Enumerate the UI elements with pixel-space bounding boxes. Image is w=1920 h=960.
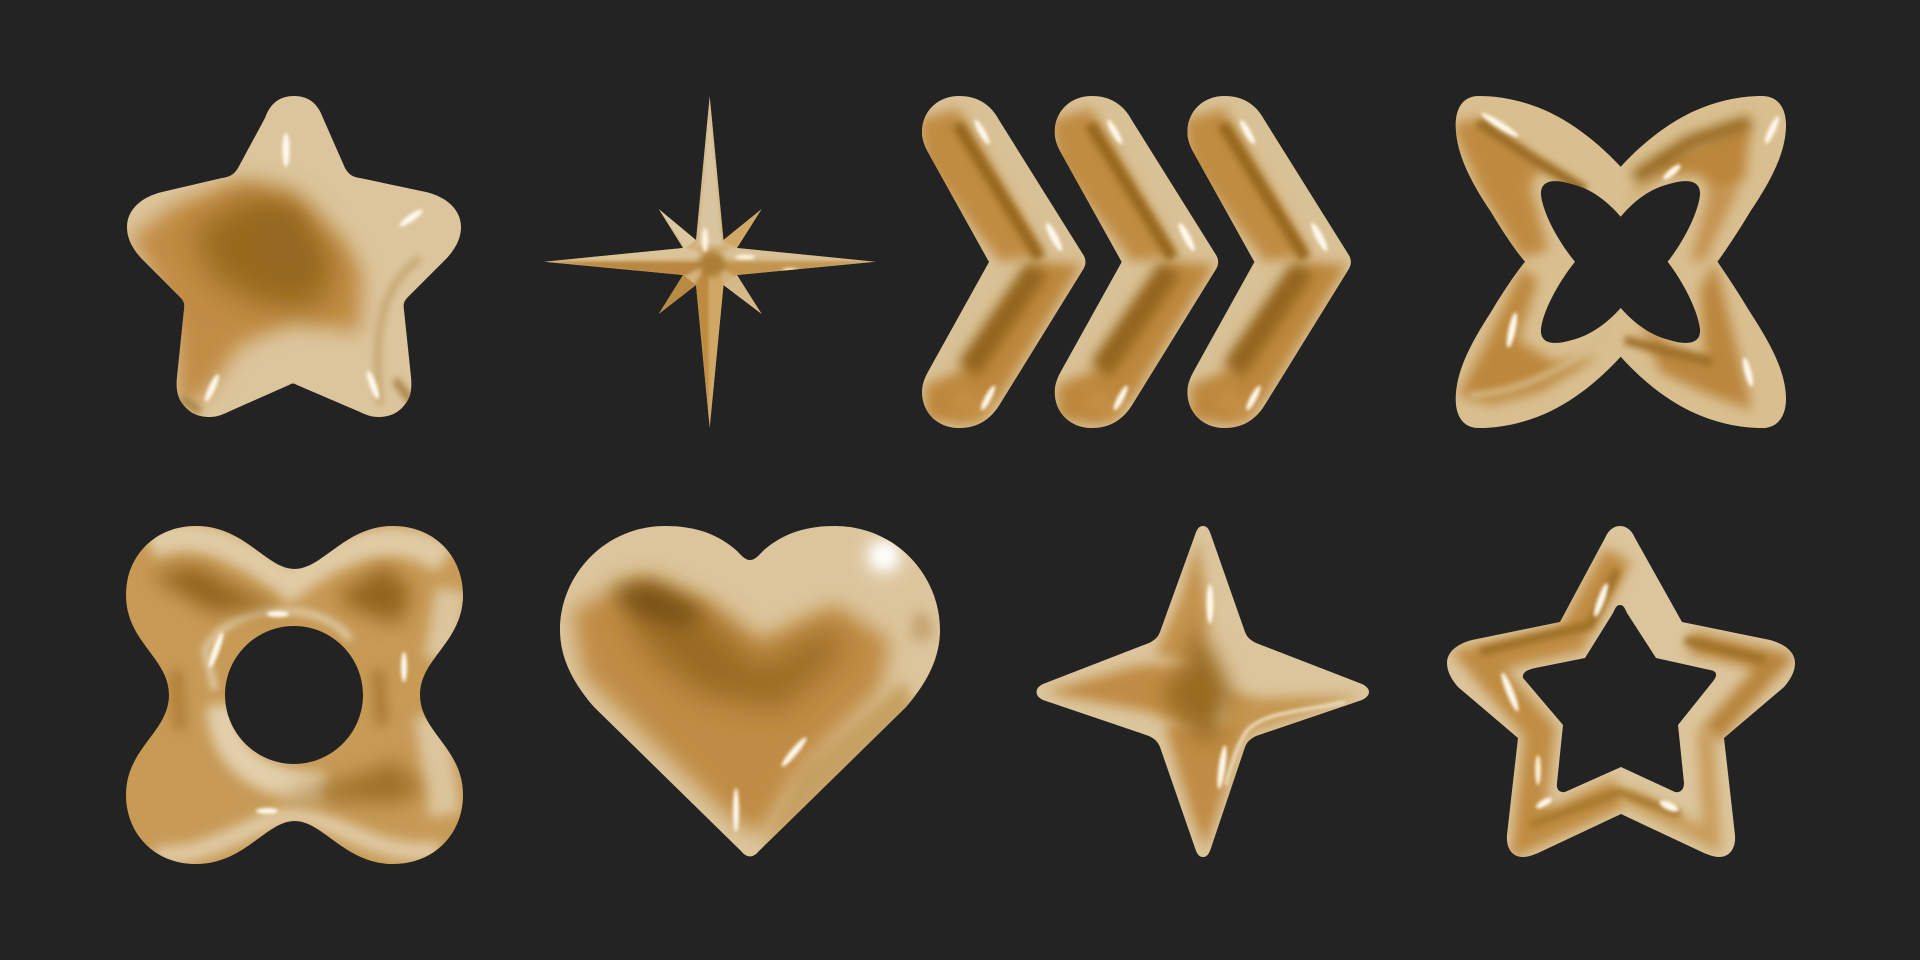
icon: eight-point sparkle <box>540 90 880 435</box>
icon: triple chevron arrows <box>910 90 1365 435</box>
chevron 3 <box>1187 96 1351 428</box>
icon: puffy gold star <box>120 90 470 425</box>
icon: four-lobed ring blob <box>120 520 470 870</box>
icon: four-petal outline shape <box>1450 90 1792 435</box>
icon: four-point star <box>1030 520 1375 865</box>
icon: gold heart <box>550 520 945 865</box>
icon: outlined star <box>1440 520 1800 865</box>
chevron 1 <box>922 96 1086 428</box>
infographic canvas: gold 3D shapes <box>126 96 1795 864</box>
chevron 2 <box>1054 96 1218 428</box>
